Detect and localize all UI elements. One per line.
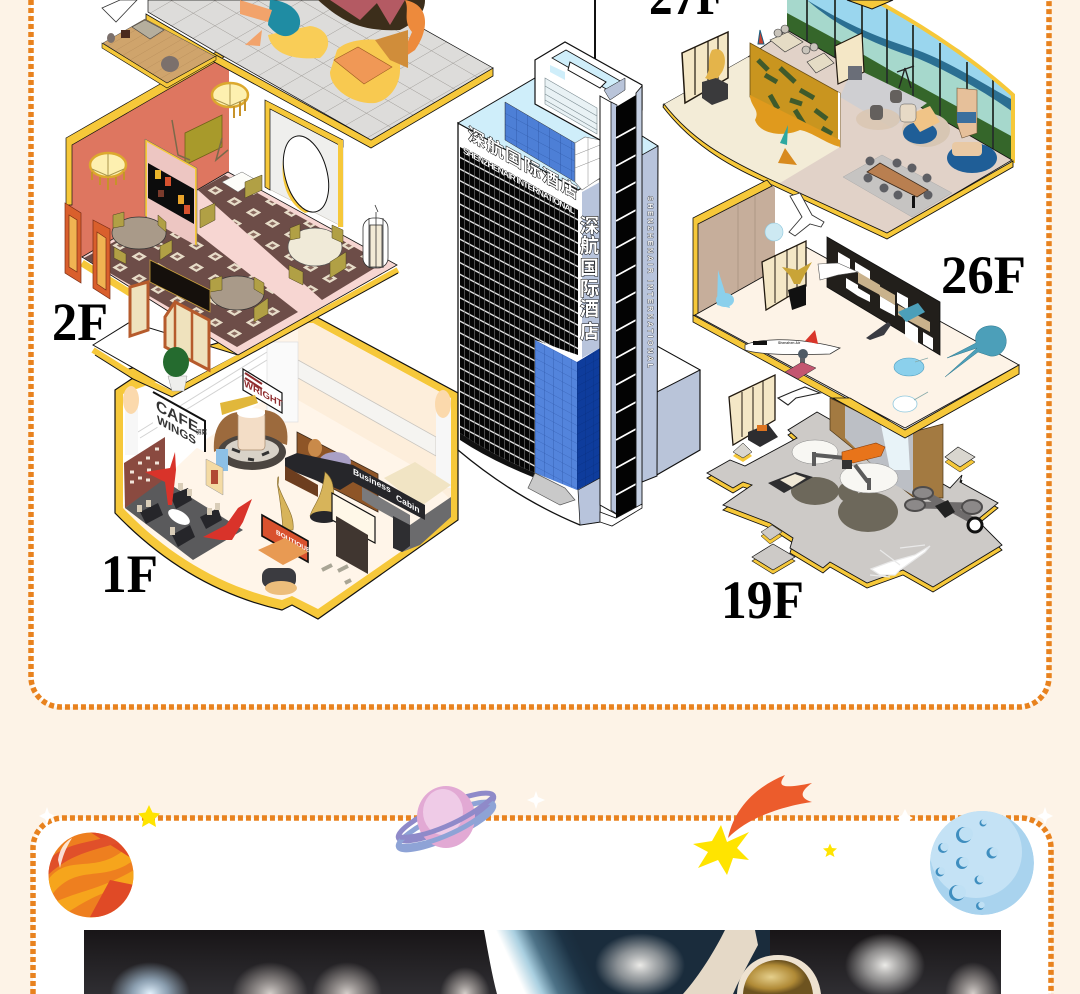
19F back wall	[830, 398, 943, 498]
27F cream zone	[663, 57, 840, 183]
1F maroon wall	[124, 437, 165, 508]
1F column	[267, 342, 298, 422]
decoration: comet	[693, 775, 812, 875]
vertical chinese name	[580, 215, 599, 343]
photo lights	[110, 930, 1001, 994]
1F cafe sign	[153, 392, 208, 452]
decoration: yellow star left	[138, 805, 160, 827]
tall white fin	[600, 96, 616, 514]
astronaut arm	[683, 930, 758, 994]
19F floating tiles	[733, 443, 975, 574]
vertical chinese name: 深	[580, 215, 599, 237]
1F signboard and photo	[332, 493, 375, 543]
27F boardroom table	[864, 156, 932, 208]
right wing vertical name: SHENZHENAIR INTERNATIONAL	[646, 196, 655, 368]
26F airplane model	[745, 330, 840, 379]
1F wright sign: WRIGHT	[244, 379, 283, 411]
upper blue glass	[505, 102, 575, 182]
3F yellow floor edge	[146, 14, 493, 148]
2F yellow folding screen	[185, 115, 222, 165]
3F bed and book	[102, 0, 179, 72]
1F dining tables	[140, 488, 222, 547]
floor 26F exhibition	[693, 180, 1019, 438]
1F business cabin counter: Cabin	[396, 493, 420, 515]
decoration: white stars	[39, 791, 1053, 827]
1F left wall	[123, 345, 267, 505]
27F cabinet	[957, 88, 977, 138]
photo: astronaut in space	[84, 930, 1001, 994]
2F potted plant	[163, 347, 189, 391]
26F wall	[693, 180, 775, 316]
vertical chinese name: 酒	[580, 298, 599, 320]
3F tile floor	[148, 0, 493, 140]
decoration: orange planet	[48, 832, 134, 918]
shenzhen air international hotel tower	[458, 0, 700, 526]
1F kiosk	[216, 449, 228, 471]
vertical chinese name: 航	[580, 234, 599, 257]
2F folding screens	[130, 282, 209, 370]
1F wright sign	[243, 369, 283, 413]
floor 1F lobby	[115, 315, 458, 619]
stair shaft windows	[616, 95, 636, 518]
2F birdcage	[363, 205, 388, 268]
27F folding screen with gold sculpture	[682, 32, 728, 105]
1F reception drum	[214, 395, 287, 470]
2F wall	[66, 57, 229, 258]
19F screen and case	[729, 375, 778, 447]
19F floor edge	[707, 417, 1002, 592]
27F lounge seats	[848, 66, 997, 173]
19F small drone	[778, 387, 820, 405]
panel: hotel floors	[31, 0, 1049, 707]
decoration: small yellow star	[823, 844, 837, 857]
2F chairs	[113, 175, 346, 322]
1F business cabin counter	[285, 453, 451, 552]
antenna	[594, 0, 596, 90]
27F floor	[663, 30, 1012, 234]
astronaut helmet	[737, 955, 821, 994]
1F cafe sign: CAFE	[156, 396, 198, 437]
right side wing	[642, 136, 658, 482]
2F carpet strips	[198, 175, 383, 300]
low annex	[655, 345, 700, 476]
1F product displays: BOUTIQUE	[276, 529, 311, 555]
1F right wall	[298, 323, 451, 500]
2F decorated display	[145, 139, 197, 246]
27F bird painting	[750, 30, 840, 165]
gray side face	[582, 182, 600, 358]
1F mural	[297, 432, 378, 512]
black curtain wall	[460, 147, 578, 473]
vertical chinese name: 店	[580, 321, 599, 343]
roof	[458, 78, 600, 190]
27F frame top	[880, 3, 1013, 163]
1F business cabin counter: Business	[353, 466, 391, 495]
2F dining tables	[112, 172, 342, 310]
1F cafe sign: WINGS	[157, 413, 196, 448]
27F gray rug	[840, 67, 927, 128]
dark blue glass side	[577, 348, 600, 490]
tower main body	[458, 123, 600, 525]
decoration: ringed planet	[394, 785, 498, 858]
blue glass front	[535, 340, 577, 490]
label: 26F: 26F	[941, 245, 1026, 305]
2F lanterns	[90, 83, 248, 190]
26F floor edge	[693, 315, 1019, 438]
roof chinese name: 深航国际酒店	[468, 123, 579, 204]
1F golden wing sculptures	[277, 477, 293, 530]
3F wooden floor	[103, 19, 216, 84]
label: 1F: 1F	[101, 544, 158, 604]
19F tablet controller	[768, 472, 813, 493]
vertical chinese name: 国	[580, 257, 599, 279]
2F carved door panels	[65, 203, 110, 299]
2F pink floor	[82, 172, 397, 355]
1F red angels	[145, 452, 176, 505]
19F orange drone	[792, 440, 898, 493]
floor 19F drone hall	[707, 365, 1019, 592]
26F flying plane	[789, 193, 824, 236]
right edge strip	[636, 86, 642, 510]
panel: lower section	[33, 818, 1051, 994]
26F floor	[695, 247, 1019, 428]
26F small planes	[818, 263, 858, 280]
19F white drone	[870, 545, 930, 577]
1F floor	[123, 323, 451, 609]
19F drone shadows	[791, 477, 898, 532]
floor 3F gallery	[102, 0, 493, 148]
entrance stairs	[528, 473, 575, 505]
roof english name: SHENZHENAIR INTERNATIONAL	[463, 146, 575, 217]
2F moon gate wall	[265, 100, 343, 227]
1F carpet	[125, 480, 243, 560]
1F frame	[115, 315, 458, 619]
floor 27F lounge	[663, 0, 1013, 239]
floor 2F restaurant	[65, 52, 398, 397]
26F photo wall	[827, 237, 940, 355]
tower crown	[535, 42, 642, 140]
label: 19F: 19F	[721, 570, 804, 630]
27F floor edge	[663, 104, 1013, 239]
19F floor overlap of 26F	[833, 365, 1019, 438]
26F teal cloud	[716, 223, 1006, 412]
19F gray drone	[905, 487, 982, 532]
19F gray floor	[707, 412, 1002, 587]
2F black sign	[150, 260, 210, 312]
26F airplane model: Shenzhen Air	[778, 341, 801, 345]
decoration: blue moon	[930, 806, 1034, 915]
27F small meeting tables	[770, 25, 834, 73]
photo planet	[484, 930, 770, 994]
2F white floor lip	[93, 322, 238, 390]
26F screen with eagle sculpture	[762, 241, 812, 310]
3F frescoes	[240, 0, 425, 103]
label: 2F: 2F	[52, 292, 108, 352]
1F cafe sign: 羽翼	[196, 429, 208, 436]
vertical chinese name: 际	[580, 278, 599, 300]
1F product displays	[258, 515, 311, 595]
27F window wall	[787, 0, 1013, 163]
